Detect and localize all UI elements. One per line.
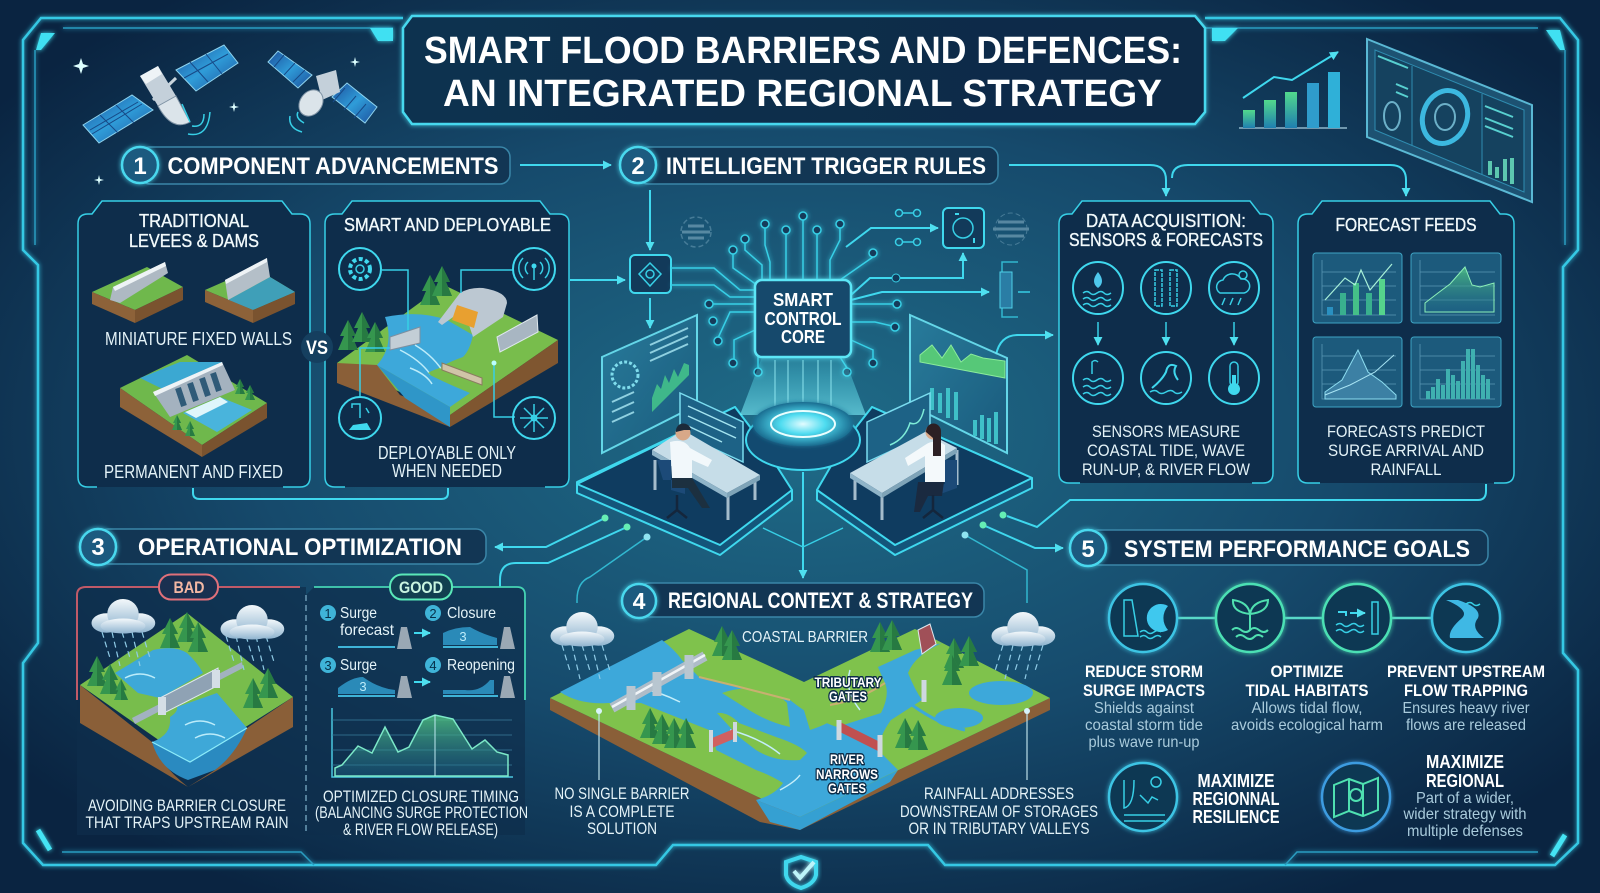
- section 3 header: OPERATIONAL OPTIMIZATION: [138, 534, 462, 561]
- panel: data acquisition: RUN-UP, & RIVER FLOW: [1082, 460, 1250, 479]
- icon: gate device: [1000, 262, 1030, 317]
- connector: lower right to panels and section 5: [962, 484, 1486, 603]
- closure sequence steps: 4: [429, 658, 437, 673]
- goals: connectors and icons: REGIONNAL: [1192, 789, 1280, 809]
- icon: trigger module: [630, 255, 671, 293]
- holographic screen: left: [602, 315, 697, 453]
- illustration: levee wall: [92, 262, 183, 323]
- section 4 header: [622, 583, 984, 618]
- arrows: core outputs: [846, 210, 989, 300]
- callout: rainfall: [900, 708, 1098, 838]
- title banner: SMART FLOOD BARRIERS AND DEFENCES:: [424, 30, 1182, 72]
- icon: regional rain clouds: [550, 612, 1055, 679]
- closure sequence steps: 2: [429, 606, 437, 621]
- section 4 header: REGIONAL CONTEXT & STRATEGY: [668, 588, 973, 613]
- panel: good closure timing: OPTIMIZED CLOSURE TIMING: [323, 787, 519, 806]
- section 3 header: 3: [91, 534, 105, 561]
- panel: forecast feeds: SURGE ARRIVAL AND: [1328, 441, 1484, 460]
- icon: water level: [1073, 262, 1123, 314]
- regional map: [550, 620, 1050, 830]
- panel: good closure timing: [306, 574, 528, 839]
- callout: no single barrier: IS A COMPLETE: [570, 802, 674, 821]
- arrow: core to regional panel: [763, 472, 843, 578]
- platform: right workstation: [817, 407, 1032, 555]
- goals: connectors and icons: Part of a wider,: [1416, 790, 1514, 807]
- smart control core chip: CORE: [781, 327, 825, 347]
- icon: tide: [1073, 352, 1123, 404]
- regional map: GATES: [829, 688, 867, 704]
- label: good: [390, 574, 452, 600]
- icon: gauge columns: [1141, 262, 1191, 314]
- panel: bad closure example: [77, 574, 306, 835]
- label: good: GOOD: [399, 578, 443, 597]
- goals: connectors and icons: FLOW TRAPPING: [1404, 681, 1528, 700]
- chart: rainfall bars: [1411, 337, 1501, 407]
- operator: right desk: [850, 393, 957, 520]
- icon: faint circuit brain: [681, 217, 711, 247]
- closure sequence steps: Surge: [340, 657, 377, 674]
- icon: rising bar chart: [1239, 52, 1347, 128]
- label: bad: [159, 574, 218, 600]
- holographic screen: right: [910, 315, 1007, 453]
- goals: connectors and icons: MAXIMIZE: [1426, 752, 1504, 772]
- panel: forecast feeds: [1298, 201, 1514, 483]
- callout: rainfall: DOWNSTREAM OF STORAGES: [900, 802, 1098, 821]
- closure sequence steps: 3: [459, 629, 467, 644]
- panel: data acquisition: SENSORS & FORECASTS: [1069, 230, 1263, 250]
- regional map: GATES: [828, 780, 866, 796]
- circuit traces around control core: [671, 212, 901, 376]
- panel: data acquisition: [1059, 201, 1273, 483]
- operator: left desk: [652, 393, 760, 520]
- goals: connectors and icons: multiple defenses: [1407, 823, 1523, 840]
- bracket under section 1 panels: [193, 488, 448, 499]
- goals: connectors and icons: avoids ecological harm: [1231, 717, 1383, 734]
- goals: connectors and icons: flows are released: [1406, 717, 1526, 734]
- goals: connectors and icons: MAXIMIZE: [1198, 771, 1274, 791]
- vs badge: [301, 331, 333, 363]
- panel: good closure timing: (BALANCING SURGE PROTECTION: [315, 803, 528, 822]
- goals: connectors and icons: plus wave run-up: [1088, 734, 1200, 751]
- section 1 header: COMPONENT ADVANCEMENTS: [168, 153, 498, 180]
- goals: connectors and icons: wider strategy with: [1403, 806, 1526, 823]
- connector: lower left to section 3 and regional panel: [495, 514, 650, 603]
- vs badge: VS: [306, 338, 328, 359]
- section 1 header: 1: [133, 153, 147, 180]
- arrow: smart panel to core: [570, 279, 625, 281]
- icon: rain clouds: [92, 599, 284, 670]
- icon: gear: [339, 248, 381, 290]
- icon: river flow: [1432, 584, 1500, 652]
- smart control core chip: SMART: [773, 290, 833, 310]
- goals: connectors and icons: RESILIENCE: [1192, 807, 1280, 827]
- regional map: RIVER: [830, 751, 864, 767]
- panel: data acquisition: SENSORS MEASURE: [1092, 422, 1240, 441]
- section 2 header: [620, 147, 998, 184]
- closure sequence steps: 1: [324, 606, 332, 621]
- section 1 header: [122, 147, 510, 184]
- icon: resilience: [1109, 763, 1177, 831]
- callout: rainfall: RAINFALL ADDRESSES: [924, 784, 1074, 803]
- goals: connectors and icons: Shields against: [1094, 700, 1195, 717]
- section 2 header: INTELLIGENT TRIGGER RULES: [666, 153, 986, 180]
- chart: surge lines: [1313, 337, 1402, 407]
- panel: forecast feeds: RAINFALL: [1370, 460, 1442, 479]
- icon: output module: [943, 208, 984, 248]
- dashboard panel: [1367, 39, 1532, 202]
- section 4 header: 4: [633, 588, 646, 614]
- smart control core chip: [755, 280, 851, 357]
- arrow: trigger rules to module: [649, 190, 651, 250]
- icon: rain forecast: [1209, 262, 1259, 314]
- illustration: deployable barrier island: [337, 266, 558, 427]
- closure sequence steps: Reopening: [447, 657, 515, 674]
- arrow: module to operator monitor: [649, 298, 651, 328]
- chart: forecast bars: [1313, 253, 1402, 323]
- icon: footer logo: [786, 857, 816, 888]
- closure sequence steps: [320, 605, 515, 698]
- arrows: section 2 to data panels: [1009, 165, 1406, 196]
- panel: smart and deployable: [325, 201, 569, 487]
- icon: signal: [513, 248, 555, 290]
- illustration: fixed wall with water: [205, 258, 295, 323]
- icon: pump: [339, 397, 381, 439]
- closure sequence steps: 3: [359, 679, 367, 694]
- smart control core chip: CONTROL: [764, 309, 842, 329]
- section 2 header: 2: [631, 153, 645, 180]
- goals: connectors and icons: Ensures heavy river: [1402, 700, 1530, 717]
- panel: bad closure example: THAT TRAPS UPSTREAM RAIN: [86, 813, 288, 832]
- title banner: [403, 16, 1205, 124]
- regional map: NARROWS: [816, 766, 878, 782]
- label: coastal barrier: COASTAL BARRIER: [742, 629, 868, 646]
- arrow: screen to data panel: [996, 335, 1053, 355]
- section 5 header: 5: [1081, 536, 1095, 563]
- closure sequence steps: forecast: [340, 622, 395, 639]
- panel: forecast feeds: FORECAST FEEDS: [1336, 215, 1476, 235]
- goals: connectors and icons: REGIONAL: [1426, 771, 1504, 791]
- callout: no single barrier: SOLUTION: [587, 819, 657, 838]
- panel: bad closure example: AVOIDING BARRIER CLOSURE: [88, 796, 286, 815]
- closure sequence steps: Surge: [340, 605, 377, 622]
- panel: data acquisition: DATA ACQUISITION:: [1086, 211, 1246, 231]
- panel: traditional levees and dams: PERMANENT AND FIXED: [104, 462, 283, 482]
- regional map: TRIBUTARY: [814, 674, 882, 690]
- goals: connectors and icons: PREVENT UPSTREAM: [1387, 662, 1545, 681]
- panel: smart and deployable: WHEN NEEDED: [392, 461, 502, 481]
- panel: traditional levees and dams: MINIATURE FIXED WALLS: [105, 329, 292, 349]
- goals: connectors and icons: REDUCE STORM: [1085, 662, 1203, 681]
- goals: connectors and icons: Allows tidal flow,: [1252, 700, 1362, 717]
- icon: faint circuit sphere: [993, 213, 1029, 245]
- icon: regional map: [1322, 763, 1390, 831]
- panel: forecast feeds: FORECASTS PREDICT: [1327, 422, 1485, 441]
- panel: good closure timing: & RIVER FLOW RELEASE): [343, 820, 498, 839]
- callout: no single barrier: [554, 708, 690, 838]
- panel: traditional levees and dams: LEVEES & DAMS: [129, 231, 259, 251]
- panel: smart and deployable: DEPLOYABLE ONLY: [378, 443, 516, 463]
- section 5 header: SYSTEM PERFORMANCE GOALS: [1124, 536, 1470, 563]
- icon: satellites: [73, 45, 377, 185]
- icon: wave: [1141, 352, 1191, 404]
- icon: thermometer: [1209, 352, 1259, 404]
- section 5 header: [1070, 530, 1488, 566]
- closure sequence steps: 3: [324, 658, 332, 673]
- platform: left workstation: [577, 407, 792, 555]
- callout: rainfall: OR IN TRIBUTARY VALLEYS: [908, 819, 1090, 838]
- panel: traditional levees and dams: TRADITIONAL: [139, 211, 249, 231]
- section 3 header: [80, 529, 486, 565]
- goals: connectors and icons: SURGE IMPACTS: [1083, 681, 1205, 700]
- icon: tidal habitat: [1216, 584, 1284, 652]
- closure sequence steps: Closure: [447, 605, 496, 622]
- panel: data acquisition: COASTAL TIDE, WAVE: [1087, 441, 1245, 460]
- arrow: section 1 to 2: [520, 164, 611, 166]
- illustration: barrier trapping rain: [80, 612, 293, 787]
- icon: flow gate: [1323, 584, 1391, 652]
- goals: connectors and icons: OPTIMIZE: [1270, 662, 1344, 681]
- goals: connectors and icons: [1083, 584, 1545, 840]
- title banner: AN INTEGRATED REGIONAL STRATEGY: [443, 73, 1162, 115]
- goals: connectors and icons: coastal storm tide: [1085, 717, 1203, 734]
- icon: storm surge: [1109, 584, 1177, 652]
- core hologram beam and disc: [740, 357, 866, 470]
- label: bad: BAD: [174, 578, 204, 597]
- illustration: dam: [120, 355, 267, 457]
- goals: connectors and icons: TIDAL HABITATS: [1246, 681, 1368, 700]
- chart: closure timing: [332, 708, 513, 777]
- arrows: sensors: [1098, 322, 1234, 345]
- icon: network: [513, 397, 555, 439]
- panel: traditional levees and dams: [78, 201, 310, 487]
- panel: smart and deployable: SMART AND DEPLOYABLE: [344, 215, 551, 235]
- chart: forecast area: [1411, 253, 1501, 323]
- callout: no single barrier: NO SINGLE BARRIER: [554, 784, 690, 803]
